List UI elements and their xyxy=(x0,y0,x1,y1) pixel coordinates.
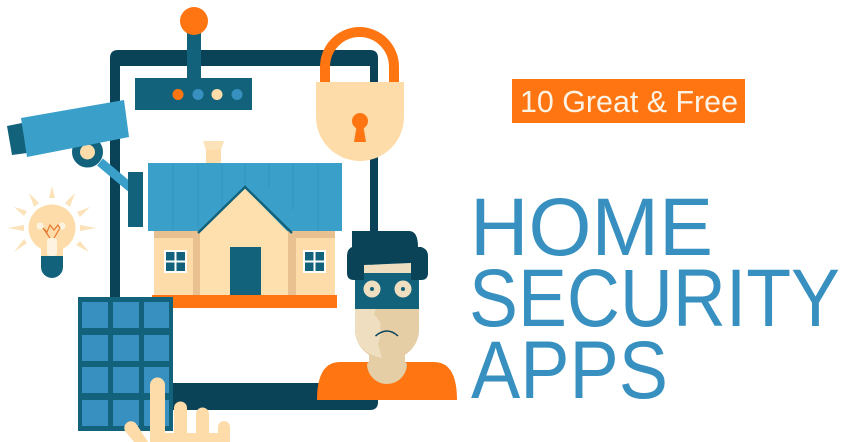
title: Home Security Apps xyxy=(469,182,840,416)
icon: padlock xyxy=(316,32,404,161)
icon: security camera xyxy=(7,100,143,227)
chimney xyxy=(203,141,224,164)
mask xyxy=(355,273,419,309)
icon: pointing hand xyxy=(124,378,230,442)
icon: burglar xyxy=(317,231,457,400)
badge: 10 Great & Free: 10 Great & Free xyxy=(520,85,738,119)
icon: house xyxy=(148,141,342,308)
orange base xyxy=(152,295,337,308)
right window xyxy=(303,250,326,273)
mouth xyxy=(376,331,398,336)
roof xyxy=(148,163,342,231)
walls xyxy=(154,231,335,296)
gable xyxy=(200,188,288,296)
face xyxy=(355,305,419,360)
title: Home Security Apps: APPS xyxy=(471,325,668,416)
shirt xyxy=(317,362,457,400)
door xyxy=(230,247,261,296)
title: Home Security Apps: HOME xyxy=(470,182,713,273)
left window xyxy=(164,250,187,273)
icon: light bulb xyxy=(8,186,96,278)
forehead xyxy=(362,263,413,276)
tablet frame xyxy=(110,50,378,410)
icon: keypad panel xyxy=(78,297,173,431)
neck xyxy=(367,352,407,384)
hair xyxy=(347,231,428,280)
icon: router with antenna xyxy=(135,7,252,110)
